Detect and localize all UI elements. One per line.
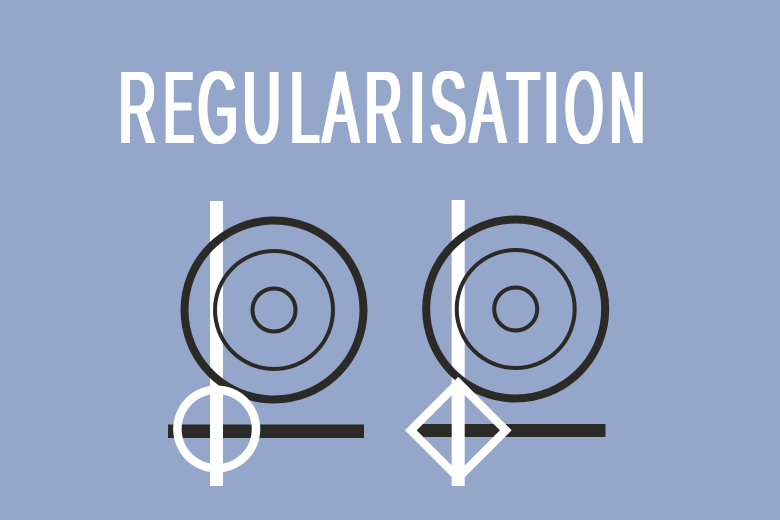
title (119, 50, 645, 164)
title: A (323, 50, 359, 164)
diagram: diamond norm (411, 200, 606, 486)
title: G (198, 50, 238, 164)
constraint circle (177, 390, 256, 468)
contour rings (426, 220, 605, 398)
title: I (543, 50, 560, 164)
title: E (164, 50, 193, 164)
constraint diamond (411, 383, 506, 478)
title: R (119, 50, 156, 164)
title: S (430, 50, 466, 164)
horizontal axis (412, 424, 606, 437)
vertical axis (210, 201, 223, 486)
contour rings (184, 220, 364, 400)
title: T (507, 50, 540, 164)
title: R (365, 50, 402, 164)
title: O (565, 50, 603, 164)
title: A (470, 50, 506, 164)
vertical axis (452, 200, 465, 486)
horizontal axis (168, 424, 364, 438)
title: U (243, 50, 280, 164)
title: L (290, 50, 319, 164)
title: N (610, 50, 645, 164)
title: I (409, 50, 425, 164)
diagram: circle norm (168, 201, 364, 486)
